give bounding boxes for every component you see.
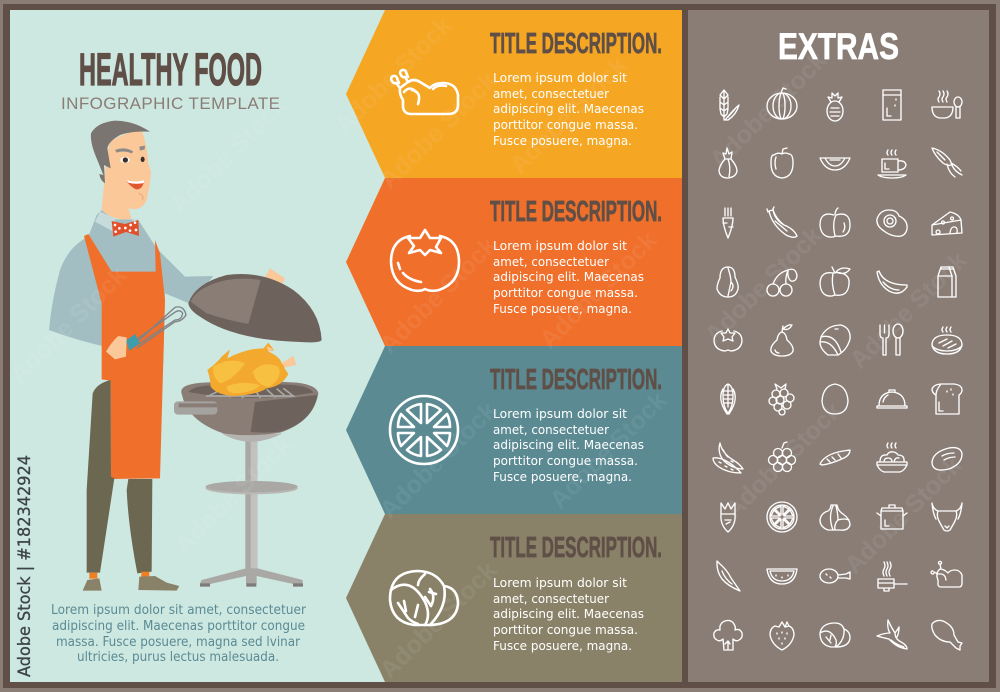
icon: cherries [767,269,797,296]
icon: melon slice [820,158,850,170]
tongs [130,307,186,348]
shirt [49,210,213,365]
icon: grapes [769,384,794,415]
heading: extras: EXTRAS [778,26,899,67]
bow tie [112,220,139,237]
panel: left character panel [10,10,410,682]
icon: carrot [723,208,733,238]
icon: strawberry [770,622,794,650]
apron [84,234,165,479]
icon: bread loaf [932,448,962,470]
icon: soup and spoon [932,91,962,118]
left panel caption: adipiscing elit. Maecenas porttitor congue [52,619,305,634]
watermark: Adobe Stock [164,91,292,219]
tongs handle [126,334,140,351]
banner 2 title: TITLE DESCRIPTION. [490,196,662,228]
icon: mango [820,325,850,355]
watermark: Adobe Stock [169,431,297,559]
banner 4 body text [493,576,644,654]
icon: roast chicken small [931,561,962,587]
banner 2: tomato [346,178,682,346]
icon: avocado [717,267,738,297]
banner 4 body text: Lorem ipsum dolor sit [493,576,627,591]
icon: milk carton [938,267,956,297]
left panel caption: ultricies, purus lectus malesuada. [77,650,279,665]
watermark: Adobe Stock [844,246,972,374]
grill lid [188,268,322,342]
watermark: Adobe Stock [839,451,967,579]
icon: drumstick [820,569,850,583]
watermark: Adobe Stock [544,386,672,514]
stock id side text: Adobe Stock | #182342924 [15,455,35,677]
banner 1 body text: amet, consectetuer [493,87,610,102]
icon: onion [719,148,737,178]
banner 3 body text: porttitor congue massa. [493,454,638,469]
icon: chili [717,561,740,591]
watermark: Adobe Stock [329,11,457,139]
icon: garlic [820,505,850,530]
icon: glass [883,90,901,120]
illustration: chef at grill [49,121,322,591]
watermark: Adobe Stock [719,396,847,524]
icon: cabbage small [820,623,850,647]
icon: roast chicken [391,70,458,114]
watermark: Adobe Stock [504,51,632,179]
banner 4 body text: Fusce posuere, magna. [493,639,632,654]
icon: cow head [932,503,962,531]
banner 4 body text: porttitor congue massa. [493,623,638,638]
trousers [87,380,152,573]
banner 3 body text: amet, consectetuer [493,423,610,438]
icon: pear [771,325,793,356]
icon: pineapple [827,93,843,121]
icon: fried egg [877,210,907,236]
icon: peach [820,267,850,296]
icon: egg [822,384,848,414]
banner 4 title: TITLE DESCRIPTION. [490,532,662,564]
banner 4 body text: amet, consectetuer [493,592,610,607]
watermark: Adobe Stock [704,46,832,174]
icon: broccoli [714,620,742,650]
banner 2 body text: amet, consectetuer [493,255,610,270]
icon: citrus small [767,502,797,532]
icon: peeled banana [877,620,907,649]
banner 3 body text: adipiscing elit. Maecenas [493,438,644,453]
socks and shoes [83,572,179,591]
subtitle: INFOGRAPHIC TEMPLATE [61,94,280,113]
neck and face [91,121,151,219]
banner 3 body text: Fusce posuere, magna. [493,470,632,485]
banner 3: citrus [346,346,682,514]
icon: citrus slice [390,396,458,464]
icon: corn [721,384,735,414]
icon: squid vegetable [932,148,962,177]
banner 1 body text: Lorem ipsum dolor sit [493,71,627,86]
icon: frying pan [878,562,907,591]
watermark: Adobe Stock [374,396,502,524]
grill stand [200,433,303,587]
panel: extras background [688,10,989,682]
icon: peas [713,443,743,473]
banner 1 body text: Fusce posuere, magna. [493,134,632,149]
banner 1 body text: porttitor congue massa. [493,118,638,133]
icon: plum [820,208,850,237]
icon: pumpkin [767,88,797,119]
icon: baguette [820,450,850,465]
banner 2 body text: Fusce posuere, magna. [493,302,632,317]
watermark: Adobe Stock [374,231,502,359]
icon: coffee cup [878,150,906,178]
banner 1 body text: adipiscing elit. Maecenas [493,102,644,117]
collar [95,212,138,232]
left panel caption: Lorem ipsum dolor sit amet, consectetuer [51,603,307,618]
icon: bell pepper [771,148,793,178]
watermark: Adobe Stock [4,261,132,389]
banner 2 body text: porttitor congue massa. [493,286,638,301]
icon: cabbage [390,571,458,625]
banner 3 body text: Lorem ipsum dolor sit [493,407,627,422]
grill bowl [174,381,318,435]
icon: tomato [391,230,459,291]
icon: wheat [720,90,739,120]
watermark: Adobe Stock [534,226,662,354]
banner 2 body text: adipiscing elit. Maecenas [493,270,644,285]
icon: tomato small [714,329,742,351]
icon: steak [932,327,962,354]
icon: watermelon [767,569,797,584]
icon: beetroot [721,503,735,532]
icon: banana [877,271,907,293]
banner 3 title: TITLE DESCRIPTION. [490,364,662,396]
icon: cooking pot [877,505,907,529]
extras icon grid [713,88,962,650]
icon: serving cloche [877,390,907,408]
watermark: Adobe Stock [374,556,502,684]
left panel caption: massa. Fusce posuere, magna sed lvinar [56,635,301,650]
banner 1: chicken [346,10,682,178]
watermark: Adobe Stock [699,221,827,349]
left panel caption [51,603,307,665]
chicken [207,343,296,396]
icon: pasta bowl [877,443,907,472]
banner 2 body text [493,239,644,317]
banner 4: cabbage [346,514,682,682]
icon: chicken leg [932,620,962,650]
icon: cheese [932,212,962,235]
banner 4 body text: adipiscing elit. Maecenas [493,607,644,622]
title: healthy food: HEALTHY FOOD [79,44,262,95]
icon: grape bunch [768,442,796,472]
icon: fork and spoon [880,324,903,355]
icon: bread slice [932,384,962,414]
banner 1 title: TITLE DESCRIPTION. [490,28,662,60]
icon: pea pods [767,207,797,237]
banner 3 body text [493,407,644,485]
hand with tongs [106,336,127,359]
banner 2 body text: Lorem ipsum dolor sit [493,239,627,254]
banner 1 body text [493,71,644,149]
watermark: Adobe Stock [374,66,502,194]
